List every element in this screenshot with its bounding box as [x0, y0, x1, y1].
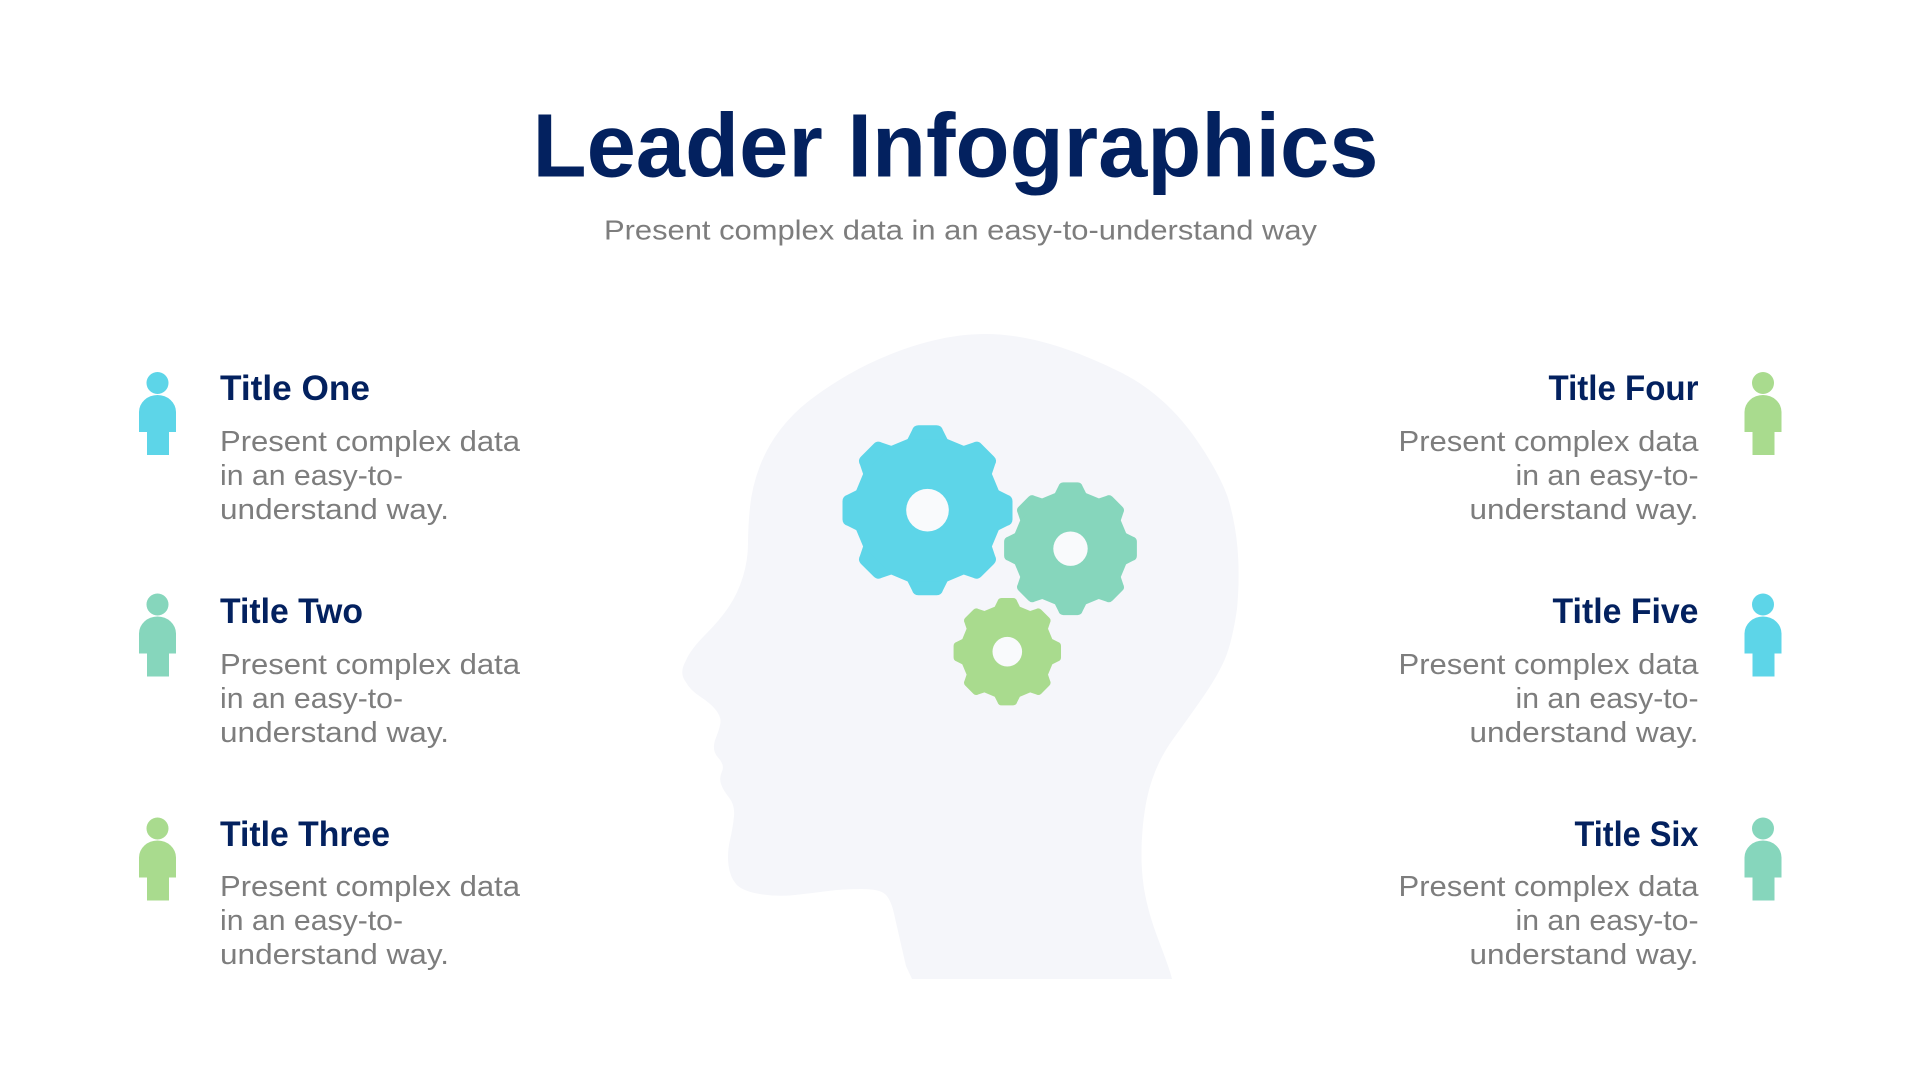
gear: green [954, 598, 1061, 705]
item: Title Four [1398, 369, 1782, 526]
text block: Title Five: understand way. [1470, 717, 1698, 749]
icon: person teal [1744, 818, 1782, 900]
text block: Title Five: Present complex data [1398, 649, 1699, 681]
text block: Title Five: in an easy-to- [1516, 683, 1698, 715]
text block: Title Two: Present complex data [220, 649, 520, 681]
text block: Title Three [220, 871, 520, 971]
heading: Title Four: Title Four [1548, 369, 1699, 408]
item: Title Two [139, 592, 520, 749]
gear: teal [1004, 482, 1137, 615]
text block: Title One: Present complex data [220, 426, 520, 458]
text block: Title One [220, 426, 520, 526]
text block: Title Three: Present complex data [220, 871, 520, 903]
text block: Title Two [220, 649, 520, 749]
item: Title Three [139, 815, 520, 971]
text block: Title Four [1398, 426, 1699, 526]
item: Title Six [1398, 815, 1782, 971]
text block: Title One: in an easy-to- [220, 460, 403, 492]
icon: person blue [1744, 594, 1782, 676]
subtitle: Present complex data in an easy-to-understand way [604, 214, 1317, 246]
heading: Title Three: Title Three [220, 815, 390, 854]
text block: Title Six [1398, 871, 1699, 971]
title: Leader Infographics [532, 96, 1378, 196]
text block: Title Five [1398, 649, 1699, 749]
heading: Title Two: Title Two [220, 592, 363, 631]
text block: Title Six: understand way. [1470, 939, 1698, 971]
text block: Title Two: in an easy-to- [220, 683, 403, 715]
icon: person blue [139, 372, 176, 455]
gear: blue [842, 425, 1012, 595]
icon: person green [1744, 372, 1782, 455]
text block: Title Six: Present complex data [1398, 871, 1699, 903]
head silhouette with gears [682, 334, 1239, 979]
heading: Title Six: Title Six [1574, 815, 1699, 854]
icon: person teal [139, 594, 176, 676]
text block: Title Four: Present complex data [1398, 426, 1699, 458]
item: Title One [139, 369, 520, 526]
heading: Title Five: Title Five [1552, 592, 1698, 631]
head shape [682, 334, 1239, 979]
text block: Title Four: understand way. [1470, 494, 1698, 526]
text block: Title Four: in an easy-to- [1516, 460, 1698, 492]
text block: Title Two: understand way. [220, 717, 449, 749]
text block: Title Three: understand way. [220, 939, 449, 971]
item: Title Five [1398, 592, 1782, 749]
heading: Title One: Title One [220, 369, 370, 408]
text block: Title Three: in an easy-to- [220, 905, 403, 937]
icon: person green [139, 818, 176, 900]
text block: Title One: understand way. [220, 494, 449, 526]
text block: Title Six: in an easy-to- [1516, 905, 1698, 937]
